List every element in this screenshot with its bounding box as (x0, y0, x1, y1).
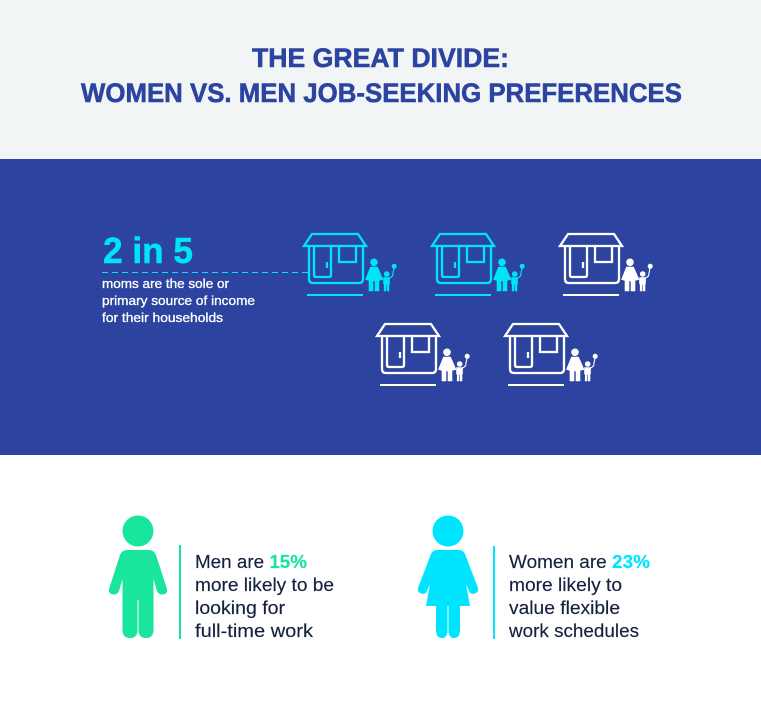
statistic description: primary source of income (102, 294, 255, 308)
divider: man (179, 545, 181, 639)
text: women statistic (508, 552, 650, 641)
icon: highlighted household 1 (304, 234, 397, 295)
title (81, 43, 682, 108)
text: women statistic: value flexible (509, 598, 620, 618)
text: men statistic: Men are 15% (195, 552, 307, 572)
icon: household 3 (560, 234, 653, 295)
divider: woman (493, 546, 495, 639)
text: women statistic: more likely to (509, 575, 622, 595)
text: women statistic: Women are 23% (509, 552, 650, 572)
icon: household 5 (505, 324, 598, 385)
icon: highlighted household 2 (432, 234, 525, 295)
icon: household 4 (377, 324, 470, 385)
text: men statistic: full-time work (195, 621, 314, 641)
icon: man (109, 516, 167, 638)
icon: woman (418, 516, 478, 638)
dashed connector (102, 272, 309, 274)
title: WOMEN VS. MEN JOB-SEEKING PREFERENCES (81, 78, 682, 108)
title: THE GREAT DIVIDE: (252, 43, 509, 73)
text: women statistic: work schedules (508, 621, 639, 641)
statistic: 2 in 5: 2 in 5 (103, 230, 193, 271)
statistic description (102, 277, 255, 325)
statistic description: for their households (102, 311, 223, 325)
header band (0, 0, 761, 159)
text: men statistic: looking for (195, 598, 285, 618)
statistic description: moms are the sole or (102, 277, 229, 291)
text: men statistic (195, 552, 334, 641)
text: men statistic: more likely to be (195, 575, 334, 595)
panel: moms statistic (0, 159, 761, 455)
